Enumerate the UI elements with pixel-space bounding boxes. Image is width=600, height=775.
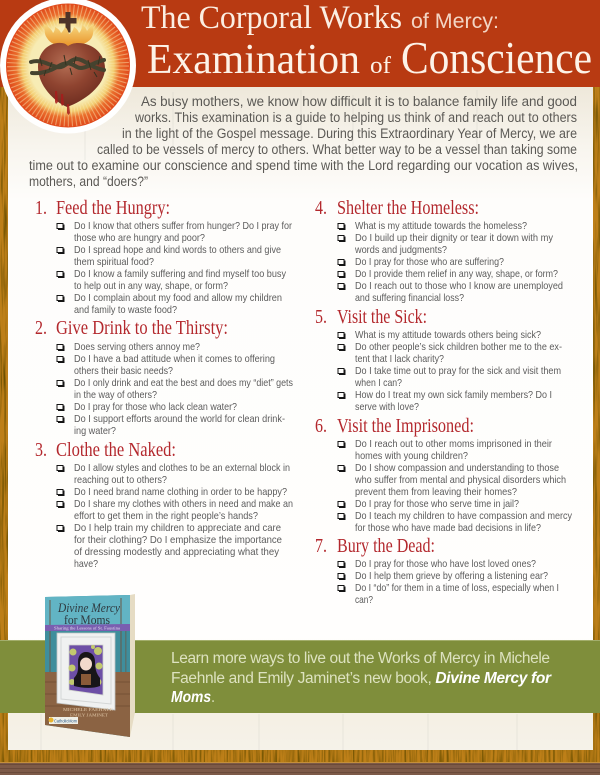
publisher logo: CatholicMom [54,718,77,724]
checklist: Shelter the Homeless: What is my attitude towards the homeless? [355,221,527,232]
checklist: Visit the Sick: Do other people’s sick children bother me to the ex- [355,342,562,353]
checklist: Clothe the Naked: have? [74,559,98,570]
checklist: Clothe the Naked: reaching out to others? [74,475,167,486]
checklist: Shelter the Homeless: Do I pray for those who are suffering? [355,257,504,268]
section 3: Clothe the Naked [35,439,293,570]
nun portrait [74,652,100,688]
call-to-action text: Learn more ways to live out the Works of Mercy in Michele [171,650,550,667]
title banner [0,0,600,87]
checklist: Clothe the Naked: Do I share my clothes with others in need and make an [74,499,293,510]
intro paragraph: in the light of the Gospel message. During this Extraordinary Year of Mercy, we are [122,126,577,141]
intro paragraph: As busy mothers, we know how difficult it is to balance family life and good [141,94,577,109]
checklist: Visit the Sick [338,330,562,413]
flames [44,23,94,49]
checklist: Shelter the Homeless: and suffering financial loss? [355,293,464,304]
checklist: Feed the Hungry [57,221,293,316]
book title: Sharing the Lessons of St. Faustina [54,626,120,630]
checklist: Give Drink to the Thirsty [57,342,293,437]
heading: Visit the Sick: 5. [315,306,327,328]
authors: MICHELE FAEHNLE [63,707,113,712]
checklist: Give Drink to the Thirsty: others their basic needs? [74,366,173,377]
heart [38,43,105,107]
heading: Shelter the Homeless: Shelter the Homeless: [337,197,479,219]
checklist: Feed the Hungry: Do I know a family suffering and find myself too busy [74,269,287,280]
checklist: Visit the Imprisoned: Do I teach my children to have compassion and mercy [355,511,573,522]
call-to-action text: Moms. [171,689,215,706]
heading: Visit the Sick [315,306,427,328]
intro paragraph: time out to examine our conscience and spend time with the Lord regarding our vocation as wives, [29,158,578,173]
checklist: Shelter the Homeless: Do I build up their dignity or tear it down with my [355,233,554,244]
checklist: Feed the Hungry: those who are hungry and poor? [74,233,205,244]
checklist: Visit the Imprisoned: homes with young children? [355,451,468,462]
checklist: Clothe the Naked: Do I help train my children to appreciate and care [74,523,281,534]
checklist: Visit the Imprisoned [338,439,573,534]
title line 2 [147,32,592,83]
checklist: Bury the Dead [338,559,559,606]
book title [54,600,120,630]
call-to-action text: Faehnle and Emily Jaminet’s new book, Divine Mercy for [171,670,552,687]
checklist: Feed the Hungry: Do I spread hope and kind words to others and give [74,245,281,256]
checklist: Feed the Hungry: Do I know that others suffer from hunger? Do I pray for [74,221,293,232]
checklist: Visit the Imprisoned: who suffer from mental and physical disorders which [354,475,566,486]
icon: sacred heart seal [0,0,136,134]
crown of thorns [31,59,104,73]
checklist: Visit the Sick: What is my attitude towards others being sick? [355,330,541,341]
checklist: Give Drink to the Thirsty: in the way of others? [74,390,157,401]
checklist: Shelter the Homeless [338,221,563,304]
checklist: Visit the Sick: Do I take time out to pray for the sick and visit them [355,366,561,377]
checklist: Visit the Imprisoned: prevent them from leaving their homes? [355,487,517,498]
section 7: Bury the Dead [315,535,559,606]
checklist: Visit the Imprisoned: Do I pray for those who serve time in jail? [355,499,519,510]
checklist: Visit the Imprisoned: Do I show compassion and understanding to those [355,463,559,474]
section 2: Give Drink to the Thirsty [35,317,293,437]
heading: Give Drink to the Thirsty: 2. [35,317,47,339]
checklist: Clothe the Naked: Do I need brand name clothing in order to be happy? [74,487,287,498]
intro paragraph: mothers, and “doers?” [29,174,148,189]
section 1: Feed the Hungry [35,197,293,316]
book cover: Divine Mercy for Moms [45,594,135,737]
blood drops [55,91,70,115]
checklist: Give Drink to the Thirsty: Do I only drink and eat the best and does my “diet” gets [74,378,293,389]
cross [59,12,76,32]
checklist: Clothe the Naked: Do I allow styles and clothes to be an external block in [74,463,290,474]
heading: Feed the Hungry: Feed the Hungry: [56,197,170,219]
title line 2: of [370,53,391,79]
checklist: Clothe the Naked: effort to get them in the right people’s hands? [74,511,258,522]
publisher logo [48,717,78,724]
heading: Visit the Imprisoned: 6. [315,415,327,437]
checklist: Visit the Sick: when I can? [354,378,402,389]
checklist: Bury the Dead: can? [355,595,373,606]
heading: Bury the Dead: Bury the Dead: [337,535,435,557]
title line 1: The Corporal Works [141,0,402,36]
checklist: Visit the Imprisoned: Do I reach out to other moms imprisoned in their [355,439,553,450]
authors [63,707,113,718]
checklist: Give Drink to the Thirsty: Do I have a bad attitude when it comes to offering [74,354,275,365]
checklist: Shelter the Homeless: Do I reach out to those who I know are unemployed [355,281,563,292]
checklist: Visit the Sick: tent that I lack charity? [355,354,444,365]
checklist: Clothe the Naked: for their clothing? Do I emphasize the importance [74,535,282,546]
heading: Clothe the Naked: Clothe the Naked: [56,439,176,461]
checklist: Give Drink to the Thirsty: Does serving others annoy me? [74,342,200,353]
heading: Clothe the Naked: 3. [35,439,47,461]
checklist: Bury the Dead: Do I help them grieve by offering a listening ear? [355,571,548,582]
checklist: Give Drink to the Thirsty: Do I pray for those who lack clean water? [74,402,237,413]
checklist: Feed the Hungry: Do I complain about my food and allow my children [74,293,282,304]
section 5: Visit the Sick [315,306,562,413]
green call-to-action band [0,640,600,713]
checklist: Bury the Dead: Do I “do” for them in a time of loss, especially when I [355,583,559,594]
heading: Visit the Sick: Visit the Sick: [337,306,427,328]
heading: Bury the Dead: 7. [315,535,327,557]
heading: Visit the Imprisoned: Visit the Imprisoned: [337,415,474,437]
section 6: Visit the Imprisoned [315,415,573,534]
title line 1: of Mercy: [411,10,499,33]
checklist: Visit the Sick: serve with love? [355,402,419,413]
checklist: Visit the Imprisoned: for those who have made bad decisions in life? [355,523,541,534]
book title: Divine Mercy [57,600,120,615]
intro paragraph: works. This examination is a guide to helping us think of and reach out to others [134,110,577,125]
heading: Shelter the Homeless: 4. [315,197,327,219]
checklist: Clothe the Naked: of dressing modestly and appreciating what they [74,547,280,558]
book title: for Moms [64,613,110,627]
checklist: Feed the Hungry: to help out in any way, shape, or form? [74,281,228,292]
checklist: Bury the Dead: Do I pray for those who have lost loved ones? [355,559,536,570]
intro paragraph [29,94,578,189]
heading: Give Drink to the Thirsty: Give Drink to the Thirsty: [56,317,228,339]
section 4: Shelter the Homeless [315,197,563,304]
checklist: Shelter the Homeless: words and judgments? [354,245,447,256]
checklist: Feed the Hungry: them spiritual food? [74,257,154,268]
checklist: Give Drink to the Thirsty: ing water? [74,426,116,437]
checklist: Visit the Sick: How do I treat my own sick family members? Do I [355,390,552,401]
picture frame [57,633,115,710]
heading: Bury the Dead [315,535,435,557]
heading: Feed the Hungry: 1. [35,197,47,219]
call-to-action text [171,650,552,706]
checklist: Clothe the Naked [57,463,293,570]
authors: EMILY JAMINET [70,712,108,718]
title line 2: Examination [147,37,360,83]
checklist: Give Drink to the Thirsty: Do I support efforts around the world for clean drink- [74,414,285,425]
checklist: Feed the Hungry: and family to waste food? [74,305,177,316]
checklist: Shelter the Homeless: Do I provide them relief in any way, shape, or form? [355,269,558,280]
